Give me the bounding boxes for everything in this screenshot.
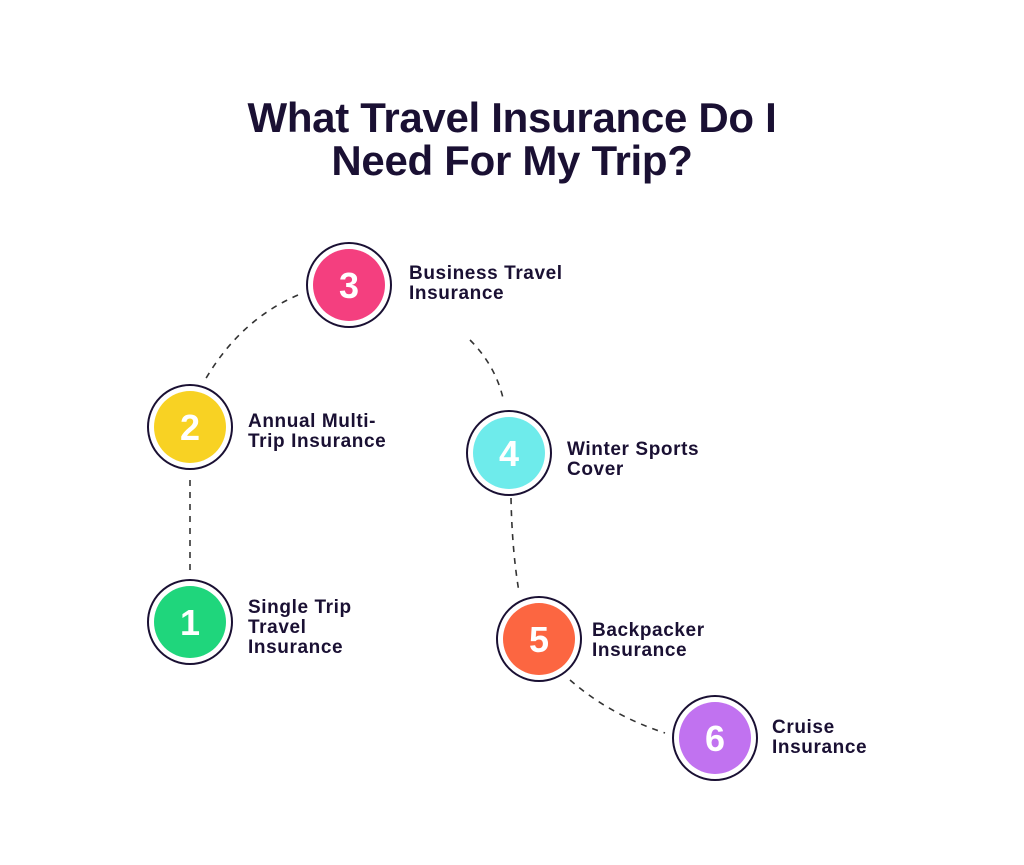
circle 4 (467, 411, 551, 495)
label 2: Annual Multi- (248, 411, 376, 432)
title: Need For My Trip? (331, 137, 693, 184)
circle 1: 1 (180, 602, 200, 643)
connector dashed lines (190, 295, 665, 733)
label 3 (409, 263, 563, 304)
title (247, 94, 776, 184)
label 3: Insurance (409, 283, 504, 304)
label 2 (248, 411, 386, 452)
label 1 (248, 597, 352, 658)
label 5: Insurance (592, 640, 687, 661)
label 3: Business Travel (409, 263, 563, 284)
circle 3: 3 (339, 265, 359, 306)
label 2: Trip Insurance (248, 431, 386, 452)
circle 3 (307, 243, 391, 327)
circle 2 (148, 385, 232, 469)
label 4: Winter Sports (567, 439, 699, 460)
label 6 (772, 717, 867, 758)
title: What Travel Insurance Do I (247, 94, 776, 141)
circle 6: 6 (705, 718, 725, 759)
label 1: Insurance (248, 637, 343, 658)
circle 4: 4 (499, 433, 519, 474)
label 5: Backpacker (592, 620, 705, 641)
label 1: Single Trip (248, 597, 352, 618)
label 1: Travel (248, 617, 307, 638)
circle 1 (148, 580, 232, 664)
label 6: Insurance (772, 737, 867, 758)
circle 2: 2 (180, 407, 200, 448)
circle 6 (673, 696, 757, 780)
label 4 (567, 439, 699, 480)
label 4: Cover (567, 459, 624, 480)
label 5 (592, 620, 705, 661)
label 6: Cruise (772, 717, 835, 738)
circle 5: 5 (529, 619, 549, 660)
circle 5 (497, 597, 581, 681)
